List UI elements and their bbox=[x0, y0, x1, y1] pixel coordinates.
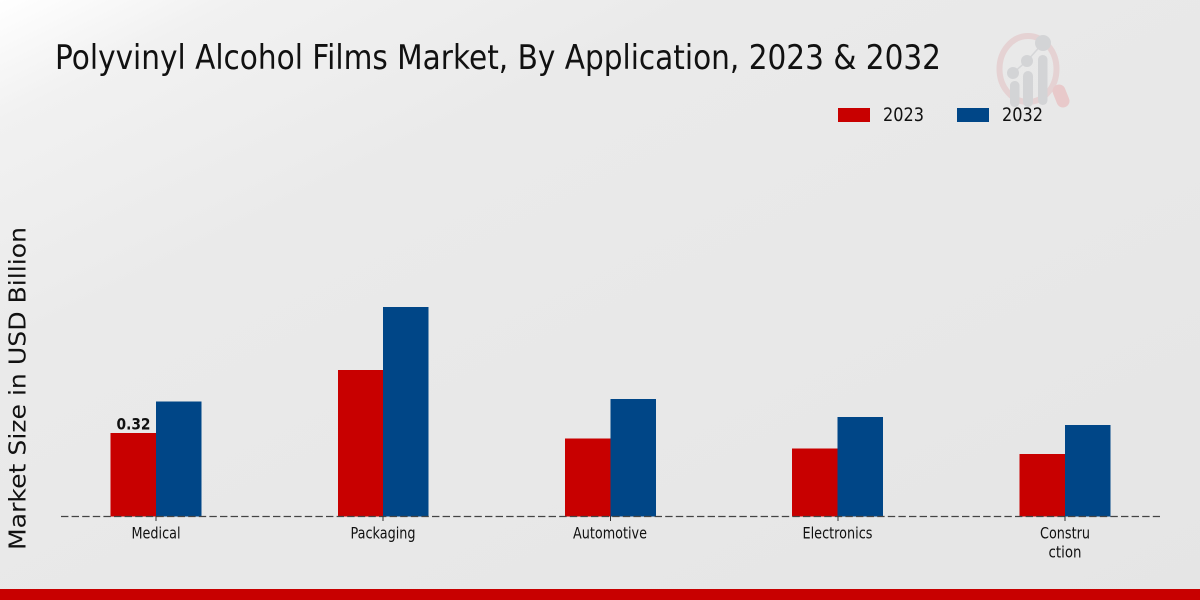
legend bbox=[838, 104, 1043, 126]
icon: watermark logo bbox=[1000, 35, 1063, 107]
x axis labels: ction bbox=[1048, 542, 1082, 562]
x axis baseline bbox=[61, 516, 1160, 518]
x axis labels: Packaging bbox=[350, 524, 416, 542]
x axis labels: Constru bbox=[1040, 524, 1090, 542]
bars: Electronics bbox=[792, 417, 883, 516]
bars: Medical bbox=[110, 402, 202, 516]
legend: 2023: 2023 bbox=[883, 104, 924, 126]
x axis labels: Automotive bbox=[573, 524, 647, 542]
x axis labels bbox=[132, 524, 1090, 562]
title: Polyvinyl Alcohol Films Market, By Application, 2023 & 2032 bbox=[55, 38, 941, 78]
value label: 0.32 bbox=[116, 414, 150, 434]
bars: Packaging bbox=[338, 307, 428, 516]
footer bar bbox=[0, 589, 1200, 600]
y axis label: Market Size in USD Billion bbox=[4, 227, 32, 550]
legend: 2032 bbox=[957, 104, 1043, 126]
x axis labels: Electronics bbox=[802, 524, 872, 542]
x axis labels: Medical bbox=[132, 524, 180, 542]
bars: Automotive bbox=[565, 399, 656, 516]
legend: 2023 bbox=[838, 104, 924, 126]
bars: Construction bbox=[1020, 425, 1110, 516]
legend: 2032: 2032 bbox=[1002, 104, 1043, 126]
